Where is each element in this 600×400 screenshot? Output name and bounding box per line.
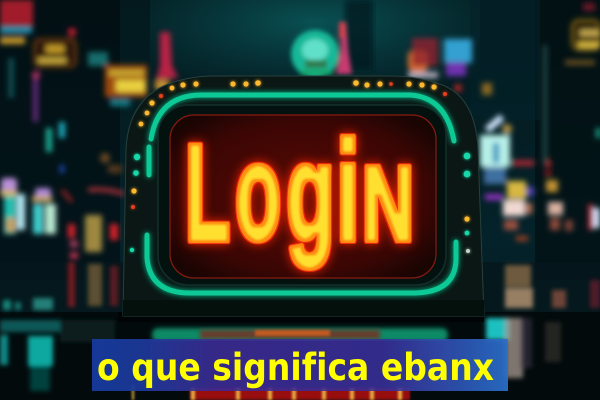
neon word: Login (185, 112, 414, 270)
floor with reflections (0, 262, 600, 400)
sign reflection on floor (132, 328, 450, 400)
background: right blurred neon signs (408, 3, 600, 241)
marquee lights (130, 80, 470, 253)
neon frame: green tube (147, 95, 456, 293)
sign cabinet (123, 76, 484, 316)
inner screen (158, 105, 446, 285)
background: left blurred neon signs (0, 0, 178, 259)
neon word: Login: N (362, 145, 414, 263)
neon word: Login: g (286, 116, 335, 268)
neon word: Login: o (235, 117, 281, 269)
background: teal globe and spire (291, 22, 352, 78)
title banner: o que significa ebanx (97, 346, 494, 389)
neon word: Login: i (336, 112, 360, 270)
neon word: Login: L (185, 117, 230, 270)
